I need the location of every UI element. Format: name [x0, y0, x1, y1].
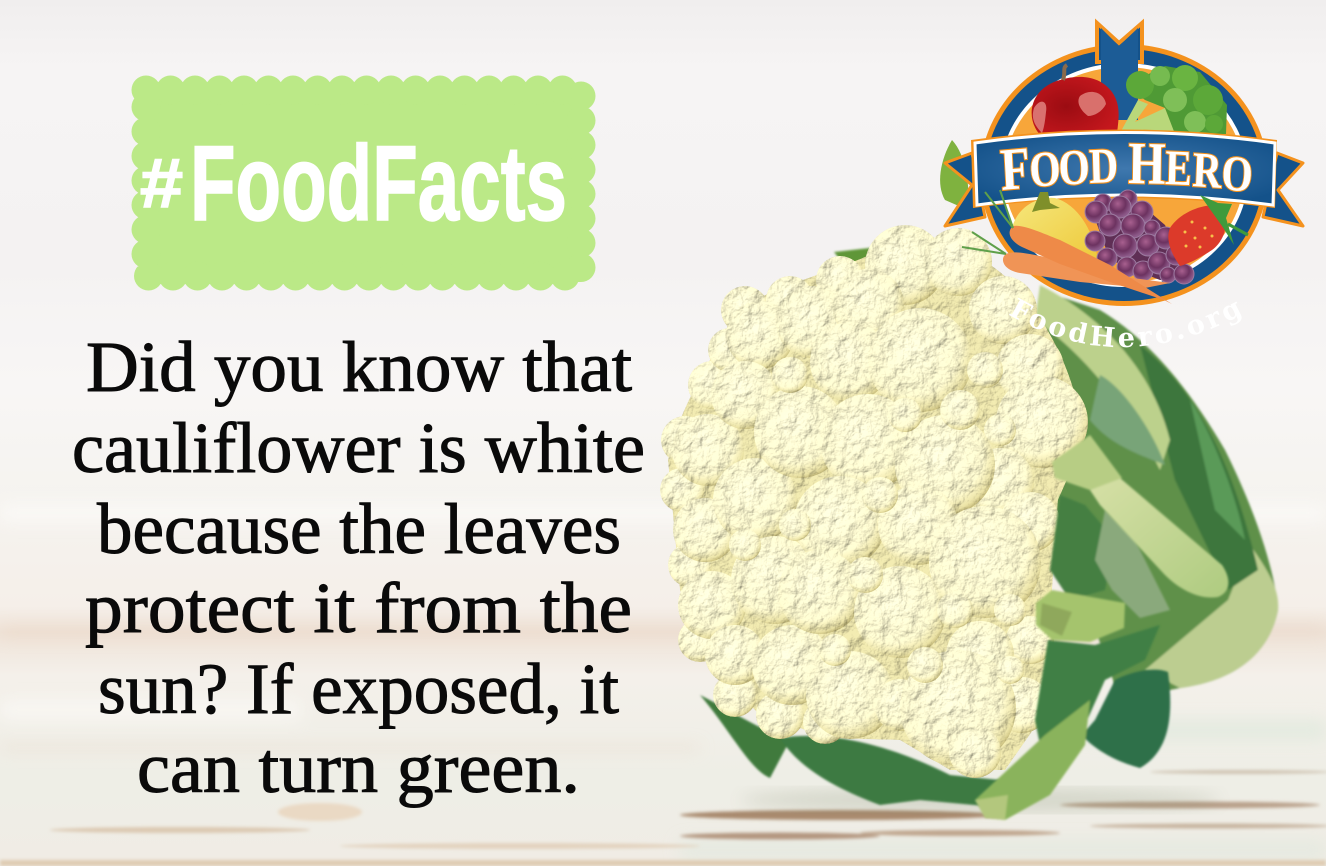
icon: broccoli	[1120, 65, 1227, 134]
text block: cauliflower fact: Did you know that	[86, 327, 632, 407]
logo wordmark: FOOD HERO: O	[1057, 139, 1091, 196]
icon: strawberry	[1168, 195, 1248, 266]
heading: #FoodFacts	[140, 123, 567, 243]
heading: #FoodFacts: #	[140, 144, 183, 222]
logo wordmark: FOOD HERO: O	[1220, 145, 1254, 203]
front leaves and stems	[975, 495, 1170, 820]
lower-left leaves	[700, 247, 1000, 806]
text block: cauliflower fact: sun? If exposed, it	[98, 649, 619, 729]
logo wordmark: FOOD HERO: O	[1028, 140, 1062, 198]
logo: Food Hero	[945, 23, 1303, 306]
icon: apple	[1032, 65, 1119, 136]
logo wordmark: FOOD HERO	[999, 130, 1254, 203]
icon: grapes	[1085, 190, 1194, 284]
text block: cauliflower fact: cauliflower is white	[72, 408, 645, 488]
logo banner	[971, 130, 1277, 208]
panel: scalloped green hashtag badge	[140, 90, 581, 276]
logo wordmark: FOOD HERO: E	[1164, 140, 1193, 196]
text block: cauliflower fact: because the leaves	[97, 489, 621, 569]
badge shape	[146, 90, 581, 276]
logo web address: FoodHero.org: FoodHero.org	[1009, 298, 1242, 348]
icon: leaf tip behind logo	[940, 140, 968, 210]
icon: yellow squash	[1012, 192, 1098, 262]
logo tails	[945, 153, 1303, 226]
back leaves	[1035, 285, 1278, 700]
logo wordmark: FOOD HERO: R	[1192, 142, 1224, 199]
icon: carrots	[962, 190, 1172, 304]
logo ring	[980, 44, 1268, 306]
top ribbon	[1097, 23, 1142, 120]
large pale stem	[1052, 435, 1228, 598]
text block: cauliflower fact: can turn green.	[137, 728, 580, 808]
logo wordmark: FOOD HERO: D	[1088, 138, 1119, 194]
photo: cauliflower head with leaves	[660, 140, 1278, 820]
logo wordmark: FOOD HERO: H	[1128, 130, 1166, 197]
heading: #FoodFacts: FoodFacts	[190, 123, 567, 243]
cauliflower curds	[660, 225, 1088, 778]
soft shadow under cauliflower	[740, 788, 1220, 812]
logo wordmark: FOOD HERO: F	[999, 135, 1032, 203]
text block: cauliflower fact: protect it from the	[85, 568, 632, 648]
text block: cauliflower fact	[72, 327, 645, 808]
